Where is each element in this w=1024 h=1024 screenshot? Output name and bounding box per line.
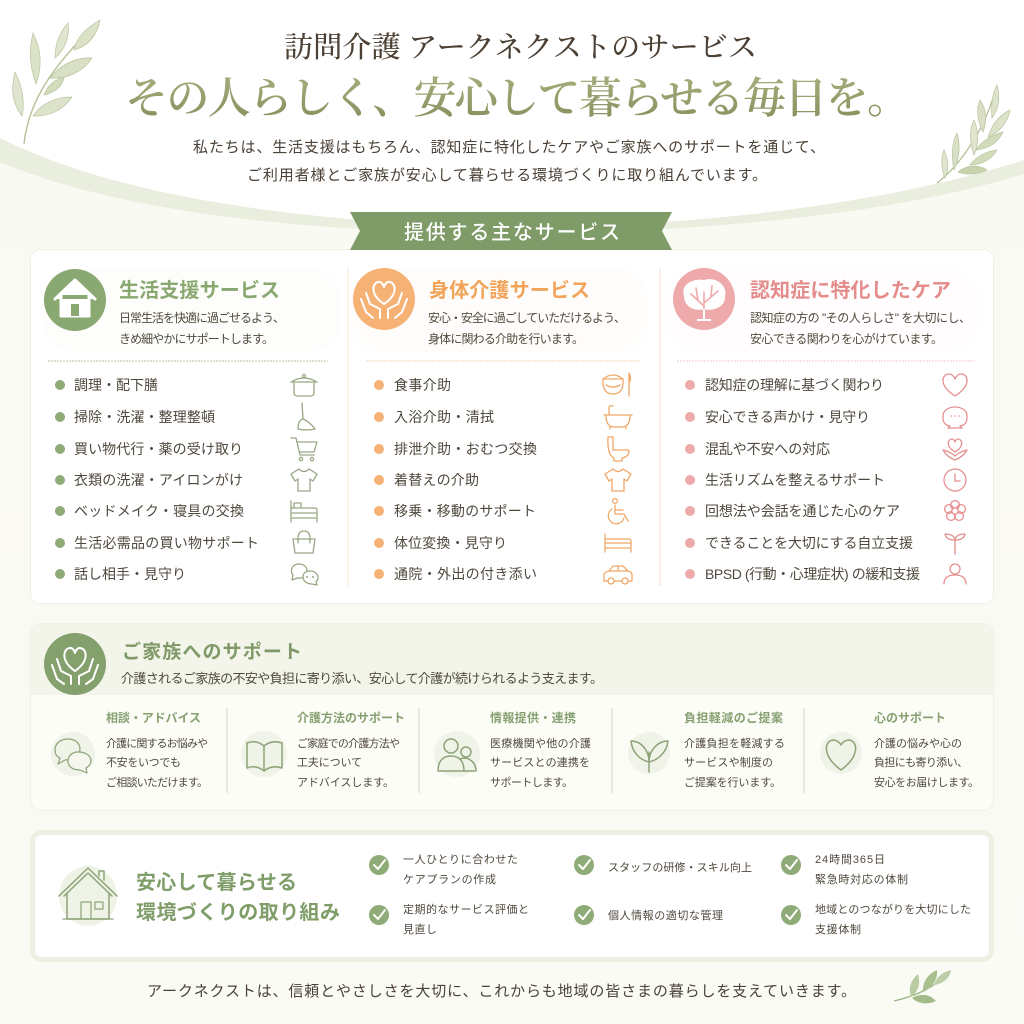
checklist: 個人情報の適切な管理	[608, 908, 723, 922]
icon: bed	[291, 501, 317, 522]
description: 介護されるご家族の不安や負担に寄り添い、安心して介護が続けられるよう支えます。	[121, 671, 603, 686]
list: daily life items: ベッドメイク・寝具の交換	[74, 503, 244, 519]
card: emotional support: 安心をお届けします。	[874, 776, 979, 789]
card: emotional support: 介護の悩みや心の	[874, 736, 962, 750]
heading: main tagline: その人らしく、安心して暮らせる毎日を。	[125, 75, 910, 123]
column: daily life support	[44, 269, 328, 585]
list: daily life items: 話し相手・見守り	[74, 566, 186, 582]
list: dementia care items: できることを大切にする自立支援	[705, 535, 913, 551]
icon: heart in hands	[353, 268, 415, 330]
checklist: 24時間365日	[815, 853, 885, 866]
description: きめ細やかにサポートします。	[119, 331, 274, 346]
card: emotional support: 負担にも寄り添い、	[874, 755, 968, 769]
card: consultation: 不安をいつでも	[106, 756, 181, 769]
checklist: 地域とのつながりを大切にした	[815, 902, 971, 916]
icon: broom	[298, 403, 315, 430]
description	[119, 310, 285, 346]
heading: physical care: 身体介護サービス	[429, 279, 590, 302]
icon: shopping cart	[291, 438, 317, 461]
icon: flower	[945, 501, 965, 520]
list: daily life items	[55, 377, 259, 582]
column: physical care	[353, 268, 640, 584]
card: burden reduction: ご提案を行います。	[684, 775, 781, 789]
icon: house	[59, 866, 117, 926]
list: physical care items: 食事介助	[394, 377, 451, 393]
description: 認知症の方の "その人らしさ" を大切にし、	[750, 310, 971, 325]
heading: company service title: 訪問介護 アークネクストのサービス	[284, 31, 757, 64]
list: daily life items: 生活必需品の買い物サポート	[74, 535, 259, 551]
icon: toilet	[608, 437, 629, 461]
description: 身体に関わる介助を行います。	[428, 331, 584, 346]
list: physical care items: 入浴介助・清拭	[394, 409, 494, 425]
heading: dementia care: 認知症に特化したケア	[750, 279, 951, 302]
list: physical care items: 移乗・移動のサポート	[394, 503, 536, 519]
card: care method: 工夫について	[297, 756, 362, 769]
card: consultation: ご相談いただけます。	[106, 775, 208, 789]
icon: basket	[293, 531, 315, 553]
description: 安心できる関わりを心がけています。	[750, 331, 943, 346]
icon: speech bubble	[943, 407, 967, 428]
panel: family support	[30, 624, 994, 810]
icon: pot	[291, 374, 317, 396]
intro text: ご利用者様とご家族が安心して暮らせる環境づくりに取り組んでいます。	[247, 167, 767, 184]
heading: safe living environment: 環境づくりの取り組み	[136, 901, 340, 924]
card: care method	[241, 710, 405, 789]
card: information sharing: サポートします。	[490, 776, 573, 789]
card: burden reduction: 負担軽減のご提案	[684, 710, 783, 725]
checklist: 支援体制	[815, 922, 861, 936]
card: care method: ご家庭での介護方法や	[297, 736, 400, 750]
description	[428, 310, 626, 346]
icon: meal bowl	[603, 373, 630, 396]
list: dementia care items: BPSD (行動・心理症状) の緩和支援	[705, 566, 920, 582]
list: physical care items	[374, 377, 537, 582]
card: consultation: 介護に関するお悩みや	[106, 736, 208, 750]
card: burden reduction: サービスや制度の	[684, 756, 773, 769]
card: information sharing: 情報提供・連携	[490, 710, 576, 725]
list: dementia care items: 認知症の理解に基づく関わり	[705, 377, 884, 393]
heading: family support: ご家族へのサポート	[122, 640, 302, 663]
footer message: アークネクストは、信頼とやさしさを大切に、これからも地域の皆さまの暮らしを支えていきます。	[147, 983, 856, 1000]
list: physical care items: 体位変換・見守り	[394, 535, 507, 551]
icon: heart	[943, 374, 967, 396]
icon: heart in hand	[943, 439, 967, 460]
description: 安心・安全に過ごしていただけるよう、	[428, 310, 626, 325]
list: dementia care items: 回想法や会話を通じた心のケア	[705, 503, 900, 519]
checklist: ケアプランの作成	[403, 873, 496, 886]
icon: car	[604, 566, 632, 584]
checklist: 定期的なサービス評価と	[403, 902, 529, 916]
checklist: 見直し	[403, 923, 437, 936]
heading: safe living environment: 安心して暮らせる	[136, 871, 297, 894]
icon: tree	[673, 268, 735, 330]
heading: daily life support: 生活支援サービス	[119, 279, 280, 302]
checklist: 一人ひとりに合わせた	[403, 853, 518, 866]
card: care method: アドバイスします。	[297, 776, 394, 789]
checklist: 緊急時対応の体制	[815, 872, 908, 886]
checklist: スタッフの研修・スキル向上	[608, 860, 752, 874]
card: emotional support: 心のサポート	[874, 710, 946, 725]
icon: t-shirt	[605, 469, 631, 491]
leaf branch: top right	[937, 85, 1010, 183]
icon: house	[44, 269, 106, 331]
description	[750, 310, 971, 346]
card: information sharing: サービスとの連携を	[490, 755, 590, 769]
list: physical care items: 通院・外出の付き添い	[394, 566, 537, 582]
list: dementia care items: 生活リズムを整えるサポート	[705, 472, 885, 488]
header white area	[0, 0, 1024, 228]
list: physical care items: 着替えの介助	[394, 472, 479, 488]
icon: wheelchair	[608, 499, 628, 524]
icon: t-shirt	[291, 469, 317, 491]
card: burden reduction: 介護負担を軽減する	[684, 736, 785, 750]
intro text	[193, 139, 825, 184]
card: consultation: 相談・アドバイス	[106, 710, 201, 725]
list: daily life items: 調理・配下膳	[74, 377, 158, 393]
banner: main services heading	[350, 212, 672, 250]
header curved band	[0, 138, 1024, 234]
intro text: 私たちは、生活支援はもちろん、認知症に特化したケアやご家族へのサポートを通じて、	[193, 139, 825, 156]
icon: person	[944, 564, 966, 584]
card: burden reduction	[628, 710, 785, 789]
panel: safe living environment	[32, 832, 992, 960]
card: care method: 介護方法のサポート	[297, 710, 405, 725]
panel: main services	[30, 250, 994, 604]
list: dementia care items: 安心できる声かけ・見守り	[705, 409, 870, 425]
card: information sharing	[434, 710, 591, 789]
column: dementia care	[673, 268, 975, 584]
list: daily life items: 衣類の洗濯・アイロンがけ	[74, 472, 243, 488]
icon: sprout	[945, 534, 965, 554]
card: consultation	[51, 710, 208, 789]
list: dementia care items	[685, 377, 920, 582]
icon: clock	[944, 469, 966, 491]
icon: heart in hands	[44, 633, 106, 695]
list: dementia care items: 混乱や不安への対応	[705, 441, 830, 457]
icon: chat bubbles	[291, 564, 318, 585]
banner: main services heading: 提供する主なサービス	[404, 221, 620, 244]
description: 日常生活を快適に過ごせるよう、	[119, 310, 285, 325]
card: information sharing: 医療機関や他の介護	[490, 736, 591, 750]
checklist	[369, 853, 971, 936]
leaf branch: footer	[894, 970, 951, 1003]
card: emotional support	[820, 710, 979, 789]
icon: bathtub	[604, 406, 632, 429]
list: daily life items: 掃除・洗濯・整理整頓	[74, 409, 215, 425]
leaf branch: top left	[13, 20, 100, 144]
icon: bed	[605, 534, 631, 552]
heading: safe living environment	[136, 871, 340, 924]
list: daily life items: 買い物代行・薬の受け取り	[74, 441, 243, 457]
list: physical care items: 排泄介助・おむつ交換	[394, 441, 537, 457]
